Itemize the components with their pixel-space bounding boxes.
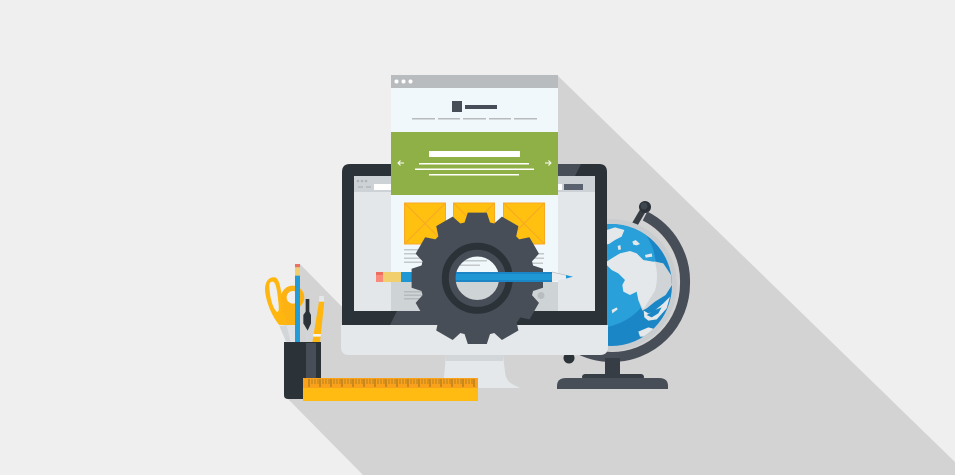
ruler: [303, 378, 478, 401]
navigation links: [412, 118, 537, 120]
globe sphere: [607, 219, 677, 351]
page footer: [391, 282, 558, 311]
pencil in front of gear: [456, 272, 573, 282]
icon: pen holder with stationery: [265, 264, 478, 401]
shaded land on globe edge: [638, 261, 672, 311]
blue straits in archipelago: [647, 307, 662, 317]
frame lower glare: [390, 311, 525, 325]
long diagonal shadow: [288, 75, 955, 475]
globe pointer pin: [632, 201, 651, 229]
icon: desk globe: [557, 201, 690, 389]
icon: gear: [412, 213, 543, 344]
pencil behind gear: [376, 272, 461, 282]
infographic scene: web design tools: [265, 75, 955, 475]
cup: [284, 342, 321, 399]
page logo: [452, 101, 497, 112]
monitor screen: [354, 176, 595, 311]
yellow image placeholders: [404, 203, 544, 244]
monitor chin: [341, 325, 608, 355]
icon: desktop monitor: [341, 164, 608, 388]
web page mockup: [391, 75, 558, 311]
blue pencil: [295, 264, 300, 342]
monitor frame: [342, 164, 607, 326]
browser title bar: [391, 75, 558, 88]
drawing compass: [303, 299, 311, 342]
globe arm: [575, 216, 685, 357]
monitor stand: [443, 355, 520, 388]
green hero banner: [391, 132, 558, 195]
scissors: [265, 277, 304, 342]
page body: [391, 88, 558, 311]
frame glare: [558, 164, 581, 176]
land masses: [607, 227, 670, 337]
page text lines: [404, 249, 544, 266]
globe stand: [557, 352, 668, 389]
marker: [312, 296, 324, 342]
